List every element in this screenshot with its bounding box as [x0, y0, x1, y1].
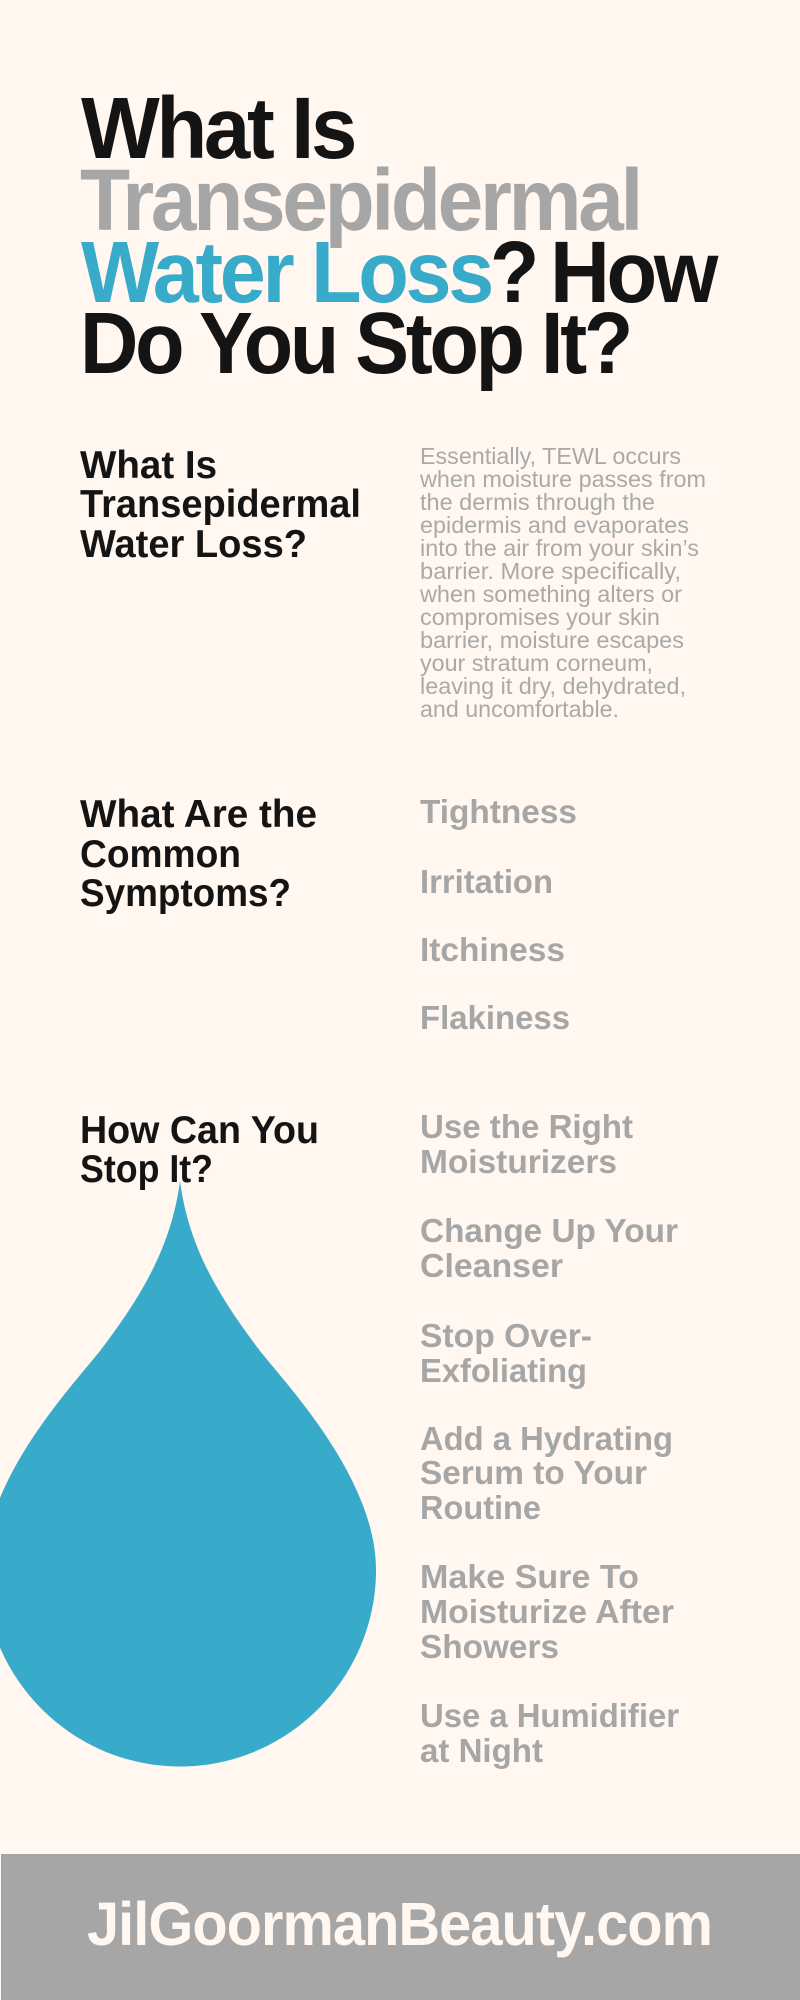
list: ways to stop it: Make Sure To: [420, 1558, 639, 1595]
text block: TEWL explanation: epidermis and evaporates: [420, 512, 689, 538]
heading: how can you stop it: Stop It?: [80, 1148, 213, 1191]
text block: TEWL explanation: when moisture passes from: [419, 466, 706, 492]
text block: TEWL explanation: the dermis through the: [420, 489, 655, 515]
text block: TEWL explanation: your stratum corneum,: [420, 650, 653, 676]
heading: common symptoms: What Are the: [80, 793, 317, 836]
heading: how can you stop it: [80, 1109, 319, 1191]
list: ways to stop it: Stop Over-: [420, 1317, 592, 1354]
icon: water drop: [0, 1181, 376, 1766]
list: ways to stop it: Routine: [420, 1489, 541, 1526]
title: Water Loss: [81, 224, 491, 321]
list: ways to stop it: Use a Humidifier: [420, 1697, 679, 1734]
text block: TEWL explanation: and uncomfortable.: [420, 696, 619, 722]
heading: common symptoms: Symptoms?: [80, 872, 291, 915]
list: ways to stop it: Serum to Your: [420, 1454, 647, 1491]
title: How: [550, 224, 719, 321]
heading: what is transepidermal water loss: Water Loss?: [80, 523, 307, 566]
heading: common symptoms: [80, 793, 317, 915]
title: Do You Stop It?: [80, 295, 630, 392]
list: ways to stop it: Change Up Your: [420, 1212, 678, 1249]
list: ways to stop it: Moisturize After: [420, 1593, 674, 1630]
list: ways to stop it: Add a Hydrating: [420, 1420, 673, 1457]
title: ?: [490, 224, 536, 321]
list: symptoms: Tightness: [420, 793, 577, 830]
footer website text: JilGoormanBeauty.com: [87, 1890, 712, 1958]
text block: TEWL explanation: [419, 443, 706, 722]
heading: what is transepidermal water loss: Transepidermal: [80, 483, 361, 526]
text block: TEWL explanation: barrier. More specifically,: [420, 558, 681, 584]
heading: what is transepidermal water loss: What Is: [80, 444, 217, 487]
list: ways to stop it: [420, 1108, 679, 1769]
list: ways to stop it: at Night: [420, 1732, 543, 1769]
footer band: [1, 1854, 800, 2000]
heading: what is transepidermal water loss: [80, 444, 361, 566]
heading: how can you stop it: How Can You: [80, 1109, 319, 1152]
list: ways to stop it: Showers: [420, 1628, 559, 1665]
title: What Is: [81, 80, 354, 177]
title: [80, 80, 719, 392]
list: symptoms: Itchiness: [420, 931, 565, 968]
text block: TEWL explanation: Essentially, TEWL occurs: [420, 443, 681, 469]
heading: common symptoms: Common: [80, 833, 241, 876]
list: ways to stop it: Use the Right: [420, 1108, 633, 1145]
list: symptoms: Irritation: [420, 863, 553, 900]
list: symptoms: Flakiness: [420, 999, 570, 1036]
list: ways to stop it: Moisturizers: [420, 1143, 617, 1180]
list: symptoms: [420, 793, 577, 1036]
title: Transepidermal: [80, 152, 640, 249]
text block: TEWL explanation: into the air from your skin’s: [420, 535, 699, 561]
text block: TEWL explanation: leaving it dry, dehydrated,: [420, 673, 686, 699]
text block: TEWL explanation: when something alters or: [419, 581, 682, 607]
text block: TEWL explanation: compromises your skin: [420, 604, 660, 630]
list: ways to stop it: Exfoliating: [420, 1352, 587, 1389]
text block: TEWL explanation: barrier, moisture escapes: [420, 627, 684, 653]
list: ways to stop it: Cleanser: [420, 1247, 563, 1284]
